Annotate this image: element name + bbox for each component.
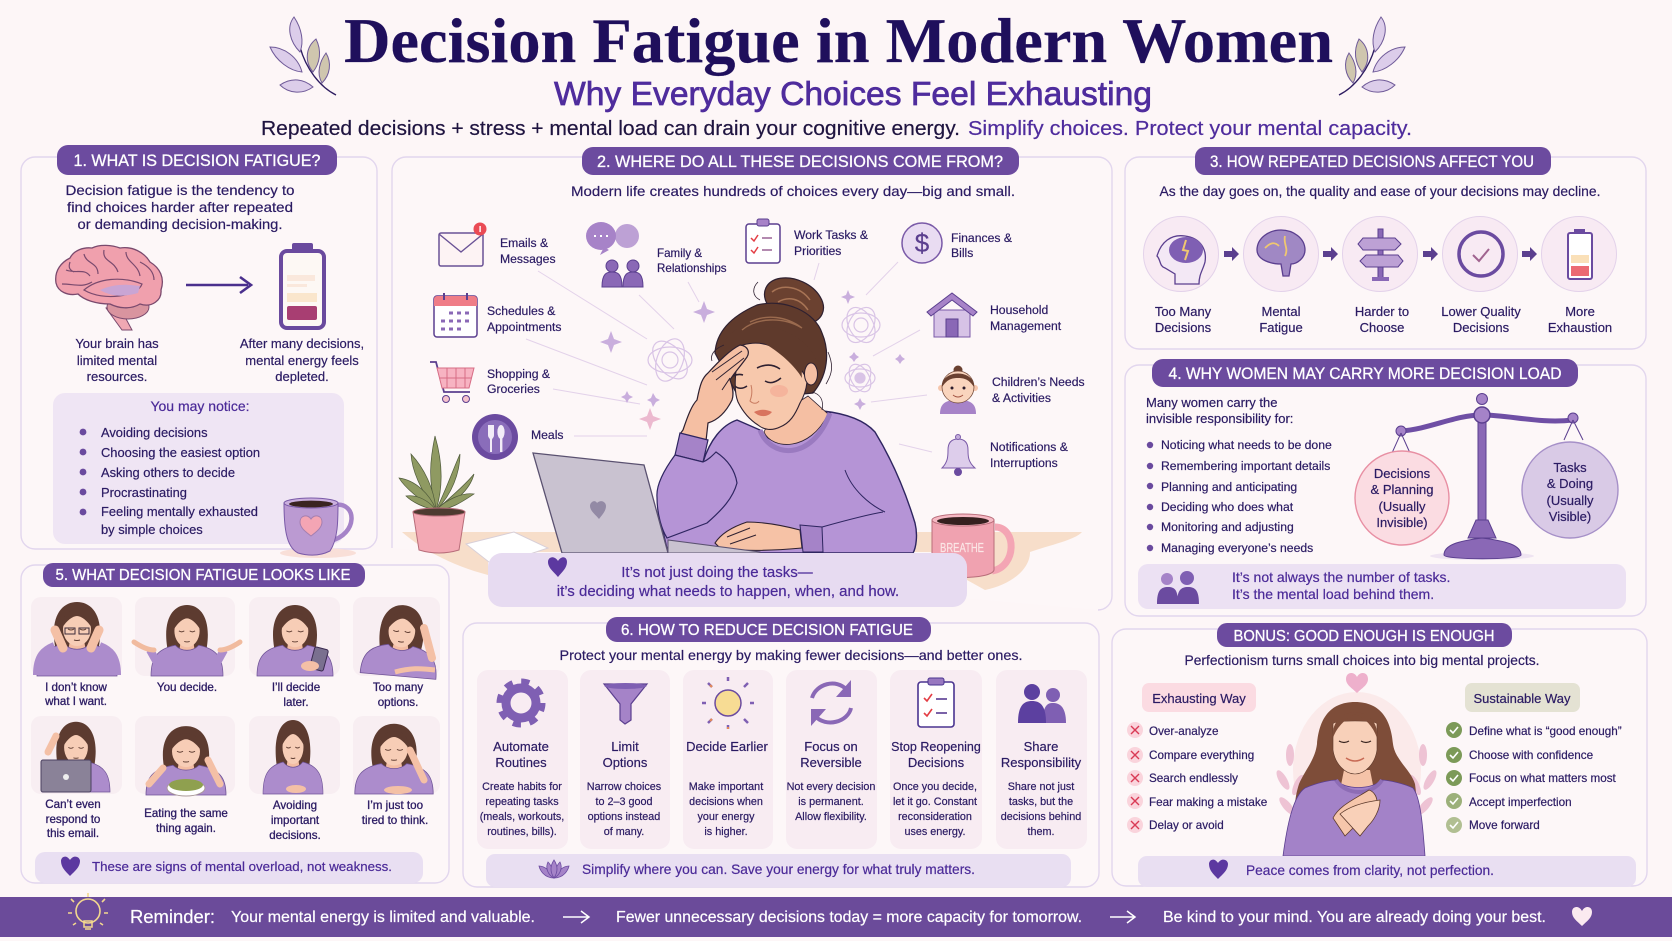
step 4: lower quality decisions [1441, 216, 1521, 335]
icon: lightbulb [68, 893, 108, 929]
scale pan: tasks and doing: & Doing [1547, 476, 1593, 491]
card: share responsibility: tasks, but the [1009, 796, 1073, 808]
card: focus on reversible [786, 670, 877, 849]
intro text 4 [1146, 395, 1293, 426]
column: sustainable way: Sustainable Way [1473, 691, 1571, 706]
notebook [466, 532, 548, 566]
callout: simplify: Simplify where you can. Save your energy for what truly matters. [582, 861, 975, 877]
label: household: Household [990, 303, 1048, 317]
card: stop reopening: Decisions [908, 755, 965, 770]
card: focus on reversible: Not every decision [787, 781, 875, 793]
callout: mental load [1138, 564, 1626, 609]
card: decide earlier [683, 670, 773, 849]
raised sleeve [657, 452, 737, 538]
tile: I don't know: I don’t know [45, 681, 108, 694]
heading pill bonus: BONUS: GOOD ENOUGH IS ENOUGH [1234, 628, 1494, 645]
tile: too many options: options. [378, 696, 418, 709]
panel 3: how repeated decisions affect you [1125, 147, 1646, 349]
mug: breathe: BREATHE [940, 540, 984, 555]
column: exhausting way: Fear making a mistake [1149, 796, 1267, 809]
scale pan: tasks and doing: (Usually [1547, 493, 1594, 508]
card: automate routines: Create habits for [482, 781, 562, 793]
bullet list: invisible responsibilities [1147, 438, 1332, 555]
step 1: too many decisions: Too Many [1155, 304, 1212, 319]
tile: eating same thing: Eating the same [144, 807, 228, 820]
step 1: too many decisions [1144, 216, 1218, 335]
label: work tasks: Priorities [794, 244, 841, 258]
scale pan: decisions and planning: & Planning [1371, 482, 1433, 497]
sweater collar [760, 413, 830, 451]
title: Decision Fatigue in Modern Women [344, 5, 1333, 76]
step 2: mental fatigue: Fatigue [1259, 320, 1303, 335]
card: stop reopening: let it go. Constant [893, 796, 977, 808]
panel 6: how to reduce decision fatigue [463, 617, 1099, 887]
bullet list: invisible responsibilities: Managing everyone’s needs [1161, 541, 1313, 555]
callout: not just tasks [488, 553, 967, 607]
bullet list: Choosing the easiest option [101, 445, 260, 460]
column: exhausting way: Compare everything [1149, 749, 1254, 762]
icon: brain [56, 245, 162, 330]
scale pan: decisions and planning: Invisible) [1376, 515, 1428, 530]
column: sustainable way: Accept imperfection [1469, 796, 1572, 809]
card: stop reopening: Stop Reopening [891, 740, 981, 754]
bullet list: Procrastinating [101, 485, 187, 500]
illustration: calm woman [1274, 673, 1439, 856]
card: limit options: Narrow choices [587, 781, 662, 793]
bullet list: Asking others to decide [101, 465, 235, 480]
card: limit options [580, 670, 670, 849]
tile: can't respond: this email. [47, 827, 99, 840]
label: finances: Bills [951, 246, 973, 260]
bullet list: invisible responsibilities: Remembering important details [1161, 459, 1330, 473]
label: work tasks: Work Tasks & [794, 228, 868, 242]
arrow [1522, 247, 1537, 261]
sleeve cuff [675, 433, 708, 462]
step 3: harder to choose: Choose [1360, 320, 1404, 335]
ear [804, 363, 818, 385]
tile: can't respond: respond to [46, 813, 100, 826]
icon: heart [1572, 907, 1592, 926]
icon: funnel [604, 683, 647, 724]
tile: eating same thing: thing again. [156, 822, 216, 835]
tile: avoiding decisions: Avoiding [273, 799, 317, 812]
caption: battery [240, 336, 364, 384]
label: schedules: Schedules & [487, 304, 555, 318]
card: limit options: of many. [604, 826, 644, 838]
card: automate routines: Routines [495, 755, 547, 770]
heading pill 5: 5. WHAT DECISION FATIGUE LOOKS LIKE [56, 567, 350, 584]
card: focus on reversible: is permanent. [798, 796, 864, 808]
icon: depleted battery [281, 243, 324, 328]
intro text 4: Many women carry the [1146, 395, 1278, 410]
bullet list: invisible responsibilities: Noticing what needs to be done [1161, 438, 1332, 452]
hair back [715, 303, 827, 400]
column: sustainable way: Define what is “good enough” [1469, 725, 1622, 738]
label: notifications: Interruptions [990, 456, 1058, 470]
plant [399, 436, 474, 553]
panel: you may notice: You may notice: [150, 398, 250, 414]
resting hand [715, 522, 802, 550]
label: emails: Emails & [500, 236, 548, 250]
icon: bell [942, 434, 975, 476]
heading pill 6: 6. HOW TO REDUCE DECISION FATIGUE [621, 622, 913, 639]
label: children: & Activities [992, 391, 1051, 405]
card: share responsibility: Responsibility [1001, 755, 1082, 770]
face [735, 343, 807, 429]
icon: heart [1209, 860, 1228, 879]
column: exhausting way: Over-analyze [1149, 725, 1219, 738]
tile: avoiding decisions [249, 716, 340, 842]
caption: battery: After many decisions, [240, 336, 364, 351]
tile: can't respond [31, 716, 122, 840]
label: meals: Meals [531, 428, 564, 442]
icon: right leaf spray [1339, 17, 1405, 95]
bullet list: invisible responsibilities: Deciding who does what [1161, 500, 1294, 514]
tagline: Repeated decisions + stress + mental load can drain your cognitive energy. [261, 118, 960, 140]
step 5: more exhaustion: Exhaustion [1548, 320, 1612, 335]
bullet list: invisible responsibilities: Monitoring and adjusting [1161, 520, 1294, 534]
step 1: too many decisions: Decisions [1155, 320, 1212, 335]
tile: too many options [353, 597, 442, 709]
column: sustainable way [1446, 683, 1622, 833]
illustration: balance scale [1392, 394, 1583, 560]
icon: meals [472, 414, 518, 460]
subtitle: Why Everyday Choices Feel Exhausting [554, 75, 1152, 112]
callout: simplify [486, 854, 1071, 887]
scale pan: tasks and doing [1522, 442, 1618, 538]
step 5: more exhaustion [1542, 216, 1616, 335]
right sleeve fold [822, 470, 885, 527]
column: sustainable way: Choose with confidence [1469, 749, 1593, 762]
heading pill 1: 1. WHAT IS DECISION FATIGUE? [74, 151, 320, 170]
arrow: brain to battery [186, 277, 251, 293]
caption: battery: depleted. [275, 369, 329, 384]
card: focus on reversible: Reversible [800, 755, 862, 770]
card: share responsibility [996, 670, 1087, 849]
raised hand [680, 345, 748, 441]
step 3: harder to choose: Harder to [1355, 304, 1409, 319]
neck [764, 396, 828, 444]
intro text 2: Modern life creates hundreds of choices every day—big and small. [571, 183, 1015, 199]
icon: dollar [902, 223, 942, 263]
heading pill 4: 4. WHY WOMEN MAY CARRY MORE DECISION LOAD [1168, 364, 1562, 383]
sweater body [658, 411, 916, 553]
icon: coffee mug [280, 498, 356, 558]
step 4: lower quality decisions: Decisions [1453, 320, 1510, 335]
icon: cycle arrows [811, 680, 851, 726]
tagline accent: Simplify choices. Protect your mental capacity. [968, 118, 1412, 140]
caption: brain [75, 336, 159, 384]
text: energy limited: Your mental energy is limited and valuable. [231, 909, 535, 926]
callout: signs of overload: These are signs of mental overload, not weakness. [92, 859, 392, 874]
text: be kind: Be kind to your mind. You are already doing your best. [1163, 909, 1546, 926]
panel 2: where decisions come from [392, 147, 1112, 610]
tile: eating same thing [135, 716, 235, 835]
card: automate routines [477, 670, 568, 849]
tile: I don't know: what I want. [44, 695, 107, 708]
column: sustainable way: Focus on what matters most [1469, 772, 1617, 785]
text: fewer decisions: Fewer unnecessary decisions today = more capacity for tomorrow. [616, 909, 1082, 926]
heading pill 1 [57, 145, 337, 175]
bullet list: by simple choices [101, 522, 203, 537]
tile: too tired [353, 716, 440, 827]
arrow [1323, 247, 1338, 261]
tile: avoiding decisions: important [271, 814, 320, 827]
facial features [733, 365, 780, 376]
card: automate routines: routines, bills). [487, 826, 557, 838]
icon: heart [548, 557, 567, 577]
icon: chat and people [586, 222, 643, 287]
intro text 6: Protect your mental energy by making fewer decisions—and better ones. [560, 647, 1022, 663]
arrow [1110, 911, 1135, 923]
card: decide earlier: Decide Earlier [686, 739, 768, 754]
tile: I don't know [31, 597, 122, 708]
definition text: or demanding decision-making. [78, 216, 282, 232]
tile: can't respond: Can’t even [45, 798, 101, 811]
icon: email [439, 222, 486, 266]
card: automate routines: (meals, workouts, [480, 811, 564, 823]
heading pill 4 [1152, 359, 1578, 387]
icon: calendar [434, 293, 477, 337]
heading pill bonus [1217, 623, 1512, 647]
panel 5: what decision fatigue looks like [21, 563, 449, 883]
scale pan: tasks and doing: Visible) [1549, 509, 1591, 524]
panel: you may notice [53, 393, 344, 544]
definition text [66, 182, 295, 232]
column: exhausting way: Search endlessly [1149, 772, 1238, 785]
card: automate routines: repeating tasks [485, 796, 559, 808]
card: decide earlier: decisions when [689, 796, 763, 808]
decorative rays [526, 262, 932, 452]
card: focus on reversible: Focus on [804, 739, 858, 754]
card: stop reopening: uses energy. [904, 826, 966, 838]
card: focus on reversible: Allow flexibility. [795, 811, 867, 823]
label: notifications: Notifications & [990, 440, 1068, 454]
card: stop reopening: Once you decide, [893, 781, 977, 793]
bullet list: Avoiding decisions [101, 425, 208, 440]
caption: brain: Your brain has [75, 336, 159, 351]
callout: signs of overload [35, 852, 423, 883]
illustration: stressed woman at laptop [533, 269, 916, 553]
icon: house [927, 293, 977, 337]
bullet list: Feeling mentally exhausted [101, 504, 258, 519]
laptop [533, 453, 668, 553]
card: decide earlier: Make important [689, 781, 763, 793]
card: limit options: Limit [611, 739, 639, 754]
tile: too tired: tired to think. [362, 814, 428, 827]
definition text: find choices harder after repeated [67, 199, 293, 215]
card: automate routines: Automate [493, 739, 549, 754]
caption: brain: resources. [87, 369, 147, 384]
scale pan: decisions and planning: Decisions [1374, 466, 1431, 481]
heading pill 5 [43, 563, 365, 587]
step 4: lower quality decisions: Lower Quality [1441, 304, 1521, 319]
label: children: Children’s Needs [992, 375, 1085, 389]
icon: checklist [918, 678, 954, 727]
label: family: Relationships [657, 262, 727, 275]
bullet list [80, 425, 260, 537]
bullet list: invisible responsibilities: Planning and anticipating [1161, 480, 1297, 494]
label: household: Management [990, 319, 1062, 333]
callout: mental load: It’s the mental load behind them. [1232, 586, 1434, 602]
card: share responsibility: Share not just [1008, 781, 1074, 793]
card: decide earlier: your energy [697, 811, 755, 823]
panel 4: why women may carry more [1125, 359, 1646, 616]
card: decide earlier: is higher. [704, 826, 748, 838]
table [402, 532, 1082, 590]
icon: heart [61, 857, 80, 876]
icon: gear [500, 682, 542, 724]
column: exhausting way [1127, 683, 1267, 833]
hair front [722, 325, 818, 378]
heading pill 6 [606, 617, 931, 642]
mug: breathe [932, 514, 1011, 578]
arrow [1423, 247, 1438, 261]
label: schedules: Appointments [487, 320, 562, 334]
step 2: mental fatigue [1244, 216, 1318, 335]
panel: bonus good enough [1112, 623, 1647, 887]
tile: too tired: I’m just too [367, 799, 423, 812]
heading pill 3 [1195, 147, 1551, 175]
card: share responsibility: them. [1027, 826, 1055, 838]
tile: avoiding decisions: decisions. [269, 829, 321, 842]
icon: left leaf spray [270, 17, 336, 95]
callout: peace [1138, 856, 1636, 887]
right cuff [800, 525, 823, 552]
heading pill 3: 3. HOW REPEATED DECISIONS AFFECT YOU [1210, 152, 1534, 171]
icon: lotus [539, 860, 569, 878]
label: shopping: Groceries [487, 382, 540, 396]
definition text: Decision fatigue is the tendency to [66, 182, 295, 198]
step 2: mental fatigue: Mental [1261, 304, 1301, 319]
card: limit options: Options [603, 755, 648, 770]
column: exhausting way: Exhausting Way [1152, 691, 1246, 706]
intro text 3: As the day goes on, the quality and ease of your decisions may decline. [1160, 183, 1600, 199]
caption: battery: mental energy feels [245, 353, 359, 368]
card: stop reopening: reconsideration [898, 811, 972, 823]
icon: sun [702, 677, 754, 729]
heading pill 2: 2. WHERE DO ALL THESE DECISIONS COME FROM? [597, 152, 1003, 171]
heading pill 2 [582, 147, 1019, 175]
intro text bonus: Perfectionism turns small choices into big mental projects. [1184, 652, 1540, 668]
scale pan: tasks and doing: Tasks [1553, 460, 1587, 475]
sparkles and tangled thought scribbles [600, 290, 905, 430]
label: emails: Messages [500, 252, 556, 266]
tile: I'll decide later: later. [283, 696, 309, 709]
callout: mental load: It’s not always the number of tasks. [1232, 569, 1450, 585]
tile: I'll decide later [249, 597, 340, 709]
tile: you decide [134, 597, 240, 694]
label: shopping: Shopping & [487, 367, 550, 381]
icon: child [938, 366, 978, 414]
callout: peace: Peace comes from clarity, not perfection. [1246, 862, 1494, 878]
caption: brain: limited mental [77, 353, 157, 368]
arrow [1224, 247, 1239, 261]
icon: cart [430, 362, 474, 402]
hair bun [757, 269, 831, 333]
step 5: more exhaustion: More [1565, 304, 1595, 319]
card: share responsibility: Share [1024, 739, 1058, 754]
tile: I'll decide later: I’ll decide [272, 681, 320, 694]
header [261, 5, 1412, 140]
icon: dollar: $ [915, 228, 930, 258]
card: limit options: options instead [588, 811, 660, 823]
reminder band [0, 893, 1672, 937]
intro text 4: invisible responsibility for: [1146, 411, 1293, 426]
label: finances: Finances & [951, 231, 1012, 245]
icon: clipboard [746, 219, 780, 263]
card: share responsibility: decisions behind [1001, 811, 1081, 823]
tile: too many options: Too many [373, 681, 423, 694]
card: limit options: to 2–3 good [595, 796, 653, 808]
scale pan: decisions and planning [1355, 451, 1449, 545]
tile: you decide: You decide. [157, 681, 217, 694]
icon: people [1018, 684, 1066, 723]
card: stop reopening [890, 670, 982, 849]
column: sustainable way: Move forward [1469, 819, 1540, 832]
arrow [563, 911, 589, 923]
label: reminder: Reminder: [130, 907, 215, 927]
step 3: harder to choose [1342, 216, 1418, 335]
callout: not just tasks: It’s not just doing the tasks— [621, 564, 813, 581]
panel 1: what is decision fatigue [21, 145, 377, 558]
scale pan: decisions and planning: (Usually [1379, 499, 1426, 514]
label: family: Family & [657, 247, 702, 260]
icon: two people [1157, 571, 1199, 604]
callout: not just tasks: it’s deciding what needs to happen, when, and how. [557, 583, 899, 600]
column: exhausting way: Delay or avoid [1149, 819, 1224, 832]
